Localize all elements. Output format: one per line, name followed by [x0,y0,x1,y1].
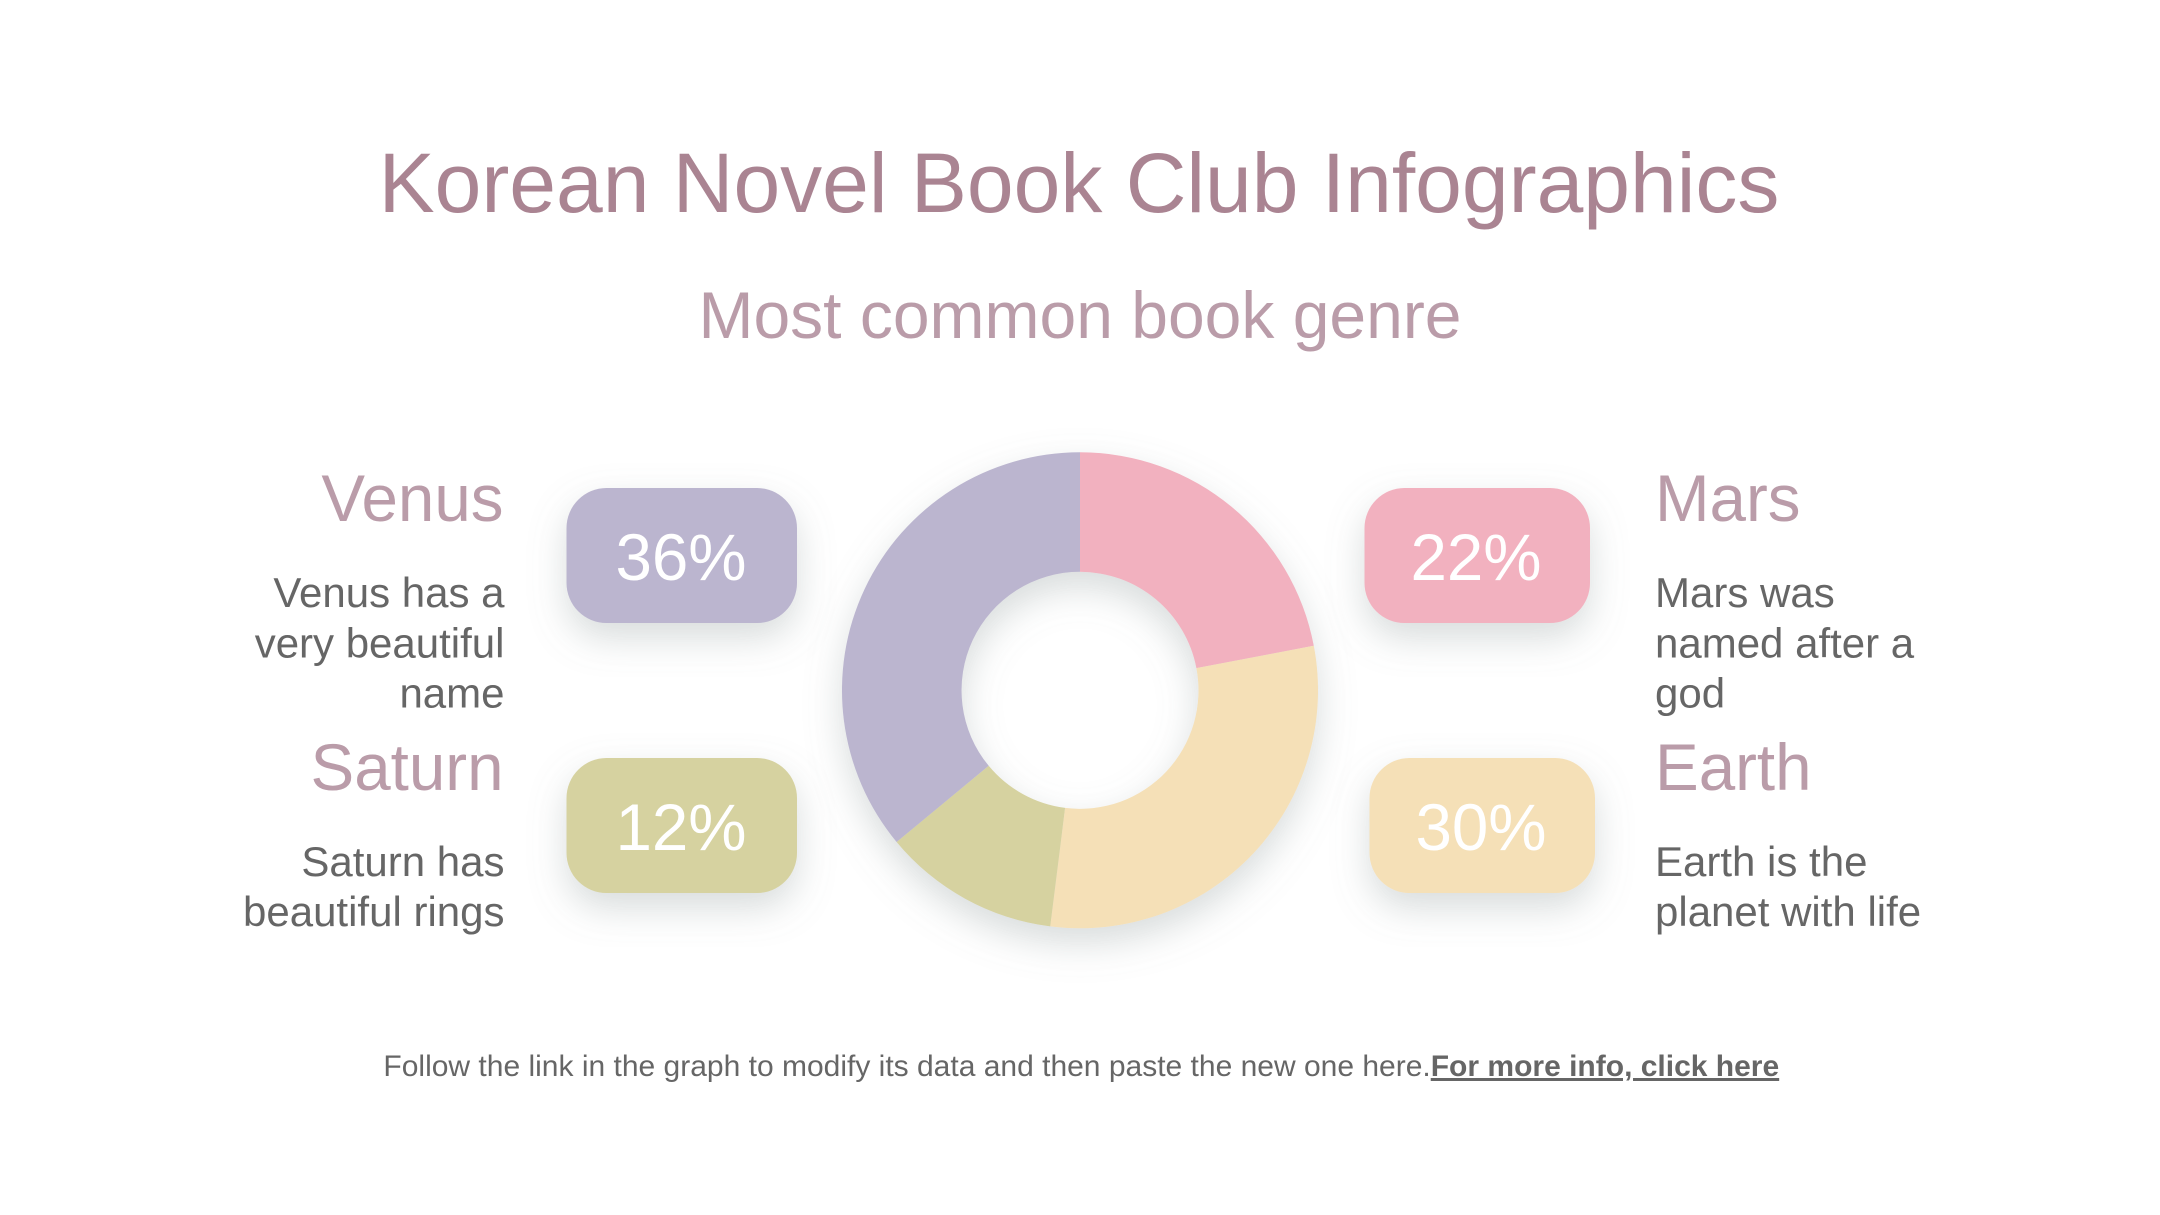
heading: Saturn: Saturn [311,731,504,804]
panel: Mars [1364,462,1915,716]
badge: 30% [1370,758,1595,893]
description: Saturn: Saturn has [301,838,504,885]
segment: Saturn 12% [897,766,1065,926]
panel: Saturn [243,731,797,935]
description: Venus: name [399,670,504,716]
title: Korean Novel Book Club Infographics [379,136,1779,230]
description: Mars: god [1655,670,1725,716]
badge: 36%: 36% [615,521,747,594]
badge: 30%: 30% [1415,791,1547,864]
badge: 22%: 22% [1410,521,1542,594]
description: Earth: Earth is the [1655,838,1867,885]
panel: Earth [1370,731,1921,935]
panel: Venus [255,462,797,716]
segment: Earth 30% [1050,646,1318,928]
segment: Venus 36% [842,452,1080,842]
description: Venus: very beautiful [255,620,504,666]
badge: 36% [566,488,797,623]
description: Saturn: beautiful rings [243,888,504,935]
description: Venus: Venus has a [273,569,505,616]
segment: Mars 22% [1080,452,1314,668]
footer note: Follow the link in the graph to modify its data and then paste the new one here.For more info, click here [383,1050,1779,1083]
heading: Earth: Earth [1655,731,1812,804]
badge: 22% [1364,488,1590,623]
description: Earth: planet with life [1655,888,1921,935]
description: Mars: Mars was [1655,569,1835,616]
subtitle: Most common book genre [698,278,1462,352]
badge: 12%: 12% [615,791,747,864]
badge: 12% [566,758,797,893]
description: Mars: named after a [1655,620,1915,666]
donut chart [842,452,1318,928]
heading: Mars: Mars [1655,462,1801,535]
heading: Venus: Venus [321,462,504,535]
